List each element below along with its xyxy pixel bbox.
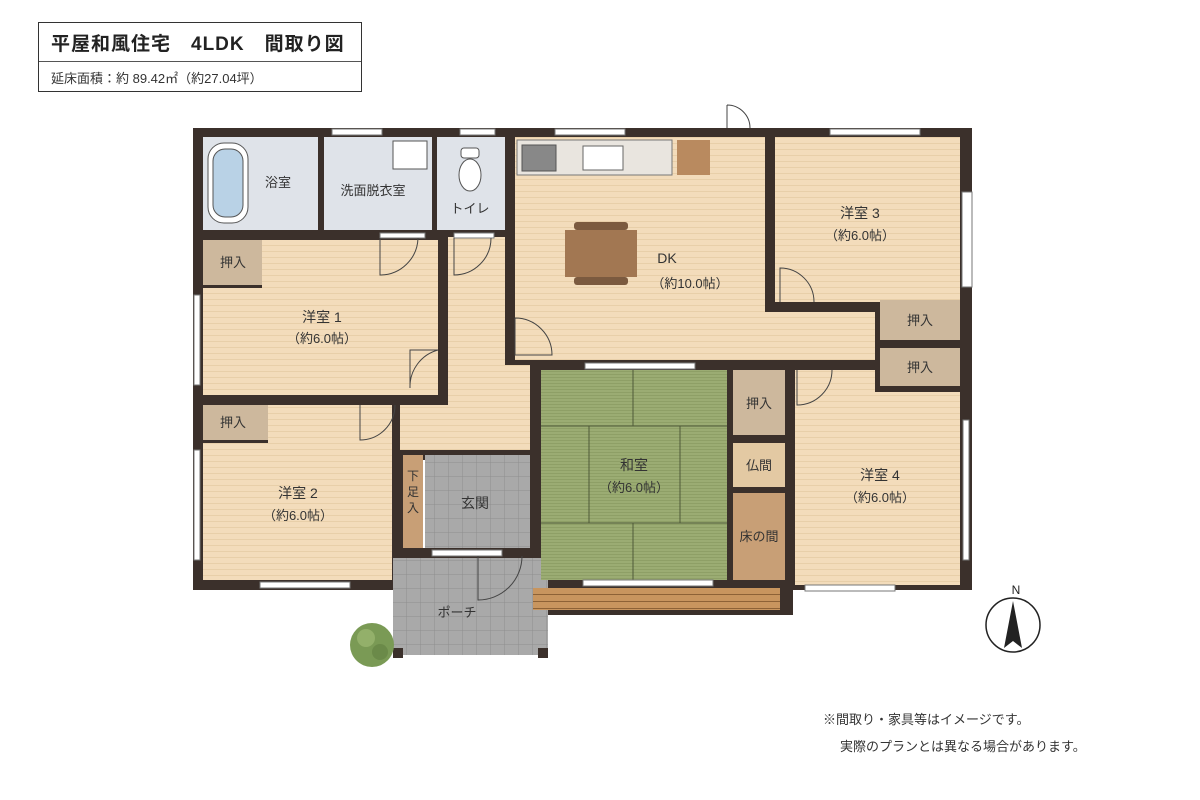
room: 和室: （約6.0帖） [599, 480, 669, 495]
room: 洋室2 [203, 405, 392, 580]
tokonoma [733, 493, 785, 580]
room: DK [515, 137, 875, 360]
area text: 延床面積：約 89.42㎡（約27.04坪） [51, 71, 263, 86]
compass: N [1012, 583, 1020, 597]
shoe storage: 入 [407, 501, 419, 515]
closet: right upper: 押入 [907, 313, 933, 328]
closet: 洋室1 [203, 240, 262, 285]
room: 洋室4: 洋室 4 [860, 467, 900, 483]
room: 洋室3 [775, 137, 960, 302]
note: 実際のプランとは異なる場合があります。 [840, 739, 1086, 754]
closet: 和室 [733, 370, 785, 435]
room: bath [203, 137, 318, 230]
room: 和室 [541, 370, 727, 580]
kitchen counter [517, 140, 710, 175]
room: bath: 浴室 [265, 175, 291, 190]
compass [986, 583, 1040, 652]
butsuma [733, 443, 785, 487]
shoe storage: 足 [407, 485, 419, 499]
porch [393, 558, 548, 658]
closet: 洋室2 [203, 405, 268, 440]
tokonoma: 床の間 [739, 529, 779, 544]
closet: right lower: 押入 [907, 360, 933, 375]
room: 洋室2: （約6.0帖） [263, 508, 333, 523]
room: toilet: トイレ [450, 201, 490, 216]
engawa deck [533, 588, 780, 610]
icon: shrub [350, 623, 394, 667]
porch: ポーチ [437, 605, 477, 620]
entrance: 玄関 [461, 495, 489, 511]
door swings [360, 105, 832, 600]
room: washroom [324, 137, 432, 230]
title box [38, 22, 362, 92]
room: DK: DK [657, 250, 677, 266]
closet: right lower [880, 348, 960, 386]
room: 洋室3: （約6.0帖） [825, 228, 895, 243]
room: 和室: 和室 [620, 457, 648, 473]
title: 平屋和風住宅 4LDK 間取り図 [51, 34, 345, 55]
room: 洋室1 [203, 240, 438, 395]
hallway [400, 237, 530, 450]
area text [39, 61, 361, 87]
room: toilet [437, 137, 505, 230]
windows [194, 129, 972, 591]
shoe storage [403, 455, 423, 548]
note: ※間取り・家具等はイメージです。 [823, 712, 1029, 727]
butsuma: 仏間 [746, 458, 772, 473]
note [823, 712, 1086, 754]
closet: 和室: 押入 [746, 396, 772, 411]
room: 洋室3: 洋室 3 [840, 205, 880, 221]
room: 洋室4 [795, 370, 960, 585]
dining table [565, 222, 637, 285]
shoe storage: 下 [407, 469, 419, 483]
room: 洋室2: 洋室 2 [278, 485, 318, 501]
closet: 洋室2: 押入 [220, 415, 246, 430]
closet: 洋室1: 押入 [220, 255, 246, 270]
room: washroom: 洗面脱衣室 [340, 183, 406, 198]
entrance [425, 455, 530, 548]
walls base [193, 128, 972, 615]
closet: right upper [880, 300, 960, 340]
room: 洋室1: （約6.0帖） [287, 331, 357, 346]
room: 洋室4: （約6.0帖） [845, 490, 915, 505]
room: DK: （約10.0帖） [651, 276, 729, 291]
room: 洋室1: 洋室 1 [302, 309, 342, 325]
